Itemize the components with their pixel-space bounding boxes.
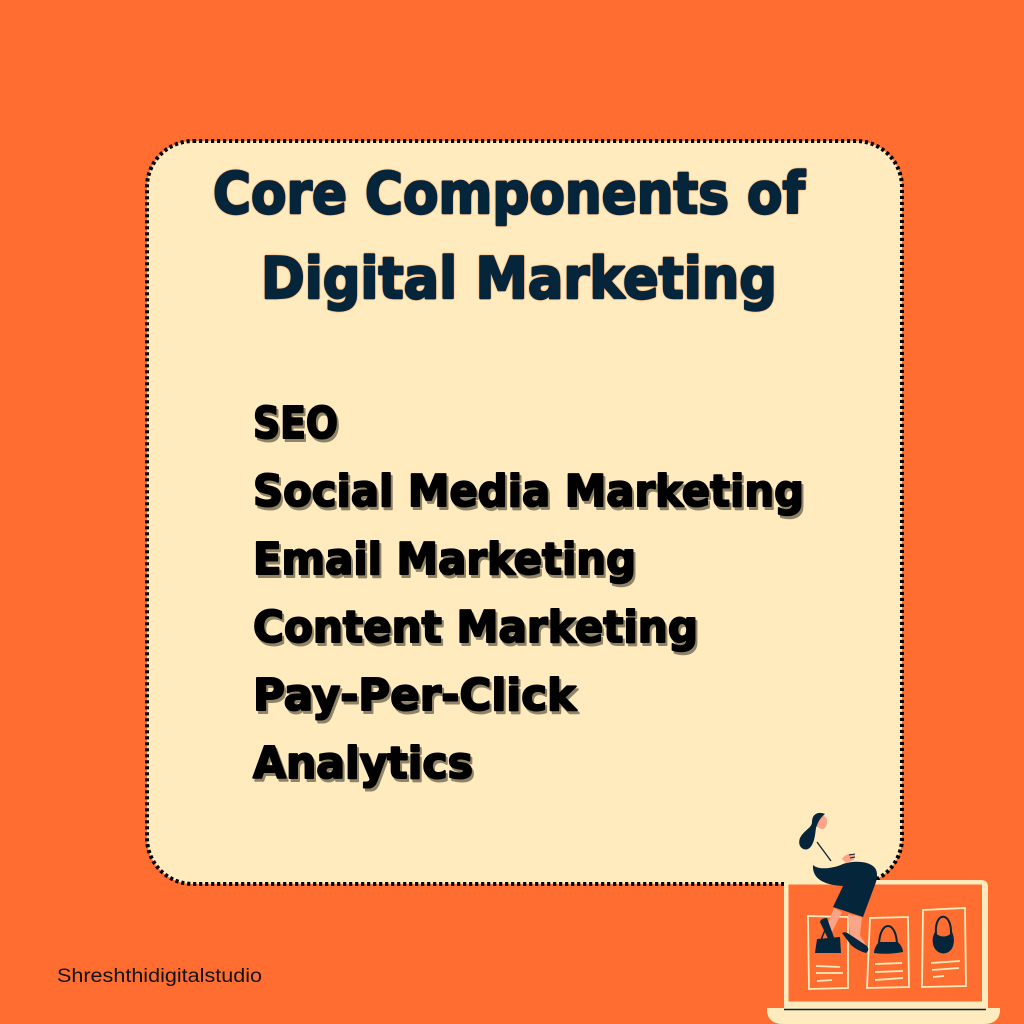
skirt and top hem [813,862,877,917]
title: Core Components of [213,161,806,227]
brand name: Shreshthidigitalstudio [57,965,262,987]
laptop screen [784,880,988,1008]
shoes [820,918,836,945]
panel: cream card [147,141,902,884]
list of core components: Pay-Per-Click [253,670,578,721]
list of core components: SEO [253,398,338,449]
arm strap line [817,842,831,861]
title: Digital Marketing [261,246,777,312]
list of core components: Analytics [253,738,473,789]
product card 2 [867,917,909,988]
laptop base [767,1008,1000,1024]
list of core components [253,398,804,789]
illustration: woman sitting on laptop [767,813,1000,1024]
legs [826,908,842,932]
list of core components: Email Marketing [253,534,636,585]
hand and phone [842,854,855,863]
list of core components: Social Media Marketing [253,466,804,517]
list of core components: Content Marketing [253,602,698,653]
product card 3 [922,908,966,987]
hair [799,813,825,849]
product card 1 [808,916,848,989]
face [816,815,827,829]
woman [799,813,877,953]
title [213,161,806,312]
